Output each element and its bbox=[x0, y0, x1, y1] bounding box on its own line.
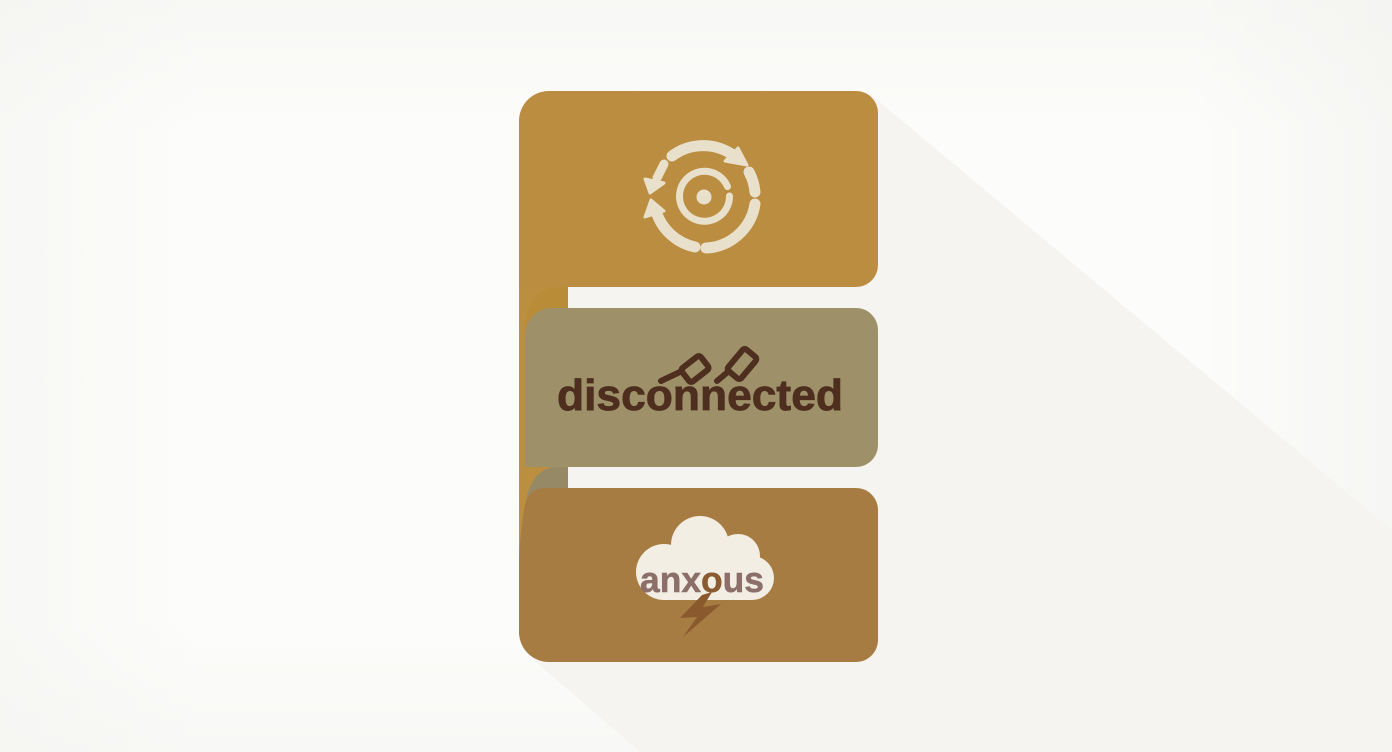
icon: cycle target bbox=[645, 146, 755, 248]
panel: middle card bbox=[525, 308, 878, 467]
fold between top and middle card bbox=[525, 287, 568, 330]
label: anxous: anxous bbox=[640, 559, 764, 600]
label: disconnected: disconnected bbox=[557, 371, 843, 420]
icon: broken chain bbox=[661, 348, 758, 383]
gap between top and middle card bbox=[568, 287, 868, 308]
spine connecting the cards bbox=[519, 270, 568, 560]
gap between middle and bottom card bbox=[568, 467, 868, 488]
panel: bottom card bbox=[519, 488, 878, 662]
icon: storm cloud bbox=[636, 516, 774, 637]
panel: top card bbox=[519, 91, 878, 287]
icon: lightning bolt bbox=[680, 592, 721, 637]
card stack bbox=[519, 91, 878, 662]
long diagonal shadow bbox=[536, 94, 1392, 752]
fold between middle and bottom card bbox=[524, 467, 568, 520]
